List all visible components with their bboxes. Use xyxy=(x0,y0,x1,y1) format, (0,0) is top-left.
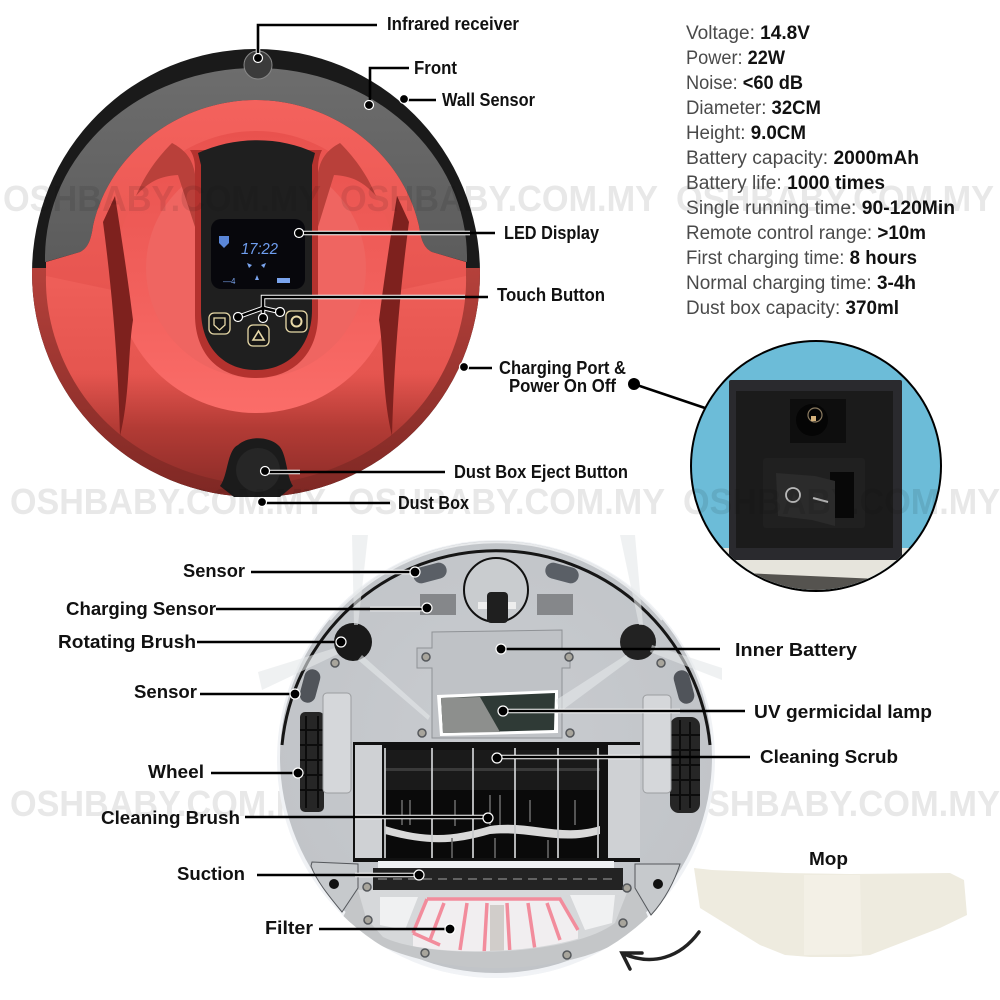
red lower body xyxy=(30,268,482,503)
callout: side sensor: Sensor xyxy=(134,682,197,702)
right corner plate xyxy=(635,864,680,915)
callout: cleaning brush: Cleaning Brush xyxy=(101,808,240,828)
right wheel xyxy=(670,717,700,813)
left wheel housing xyxy=(323,693,351,793)
watermark: row three: OSHBABY.COM.MY xyxy=(10,783,327,824)
callout: touch button xyxy=(234,285,605,322)
callout: wheel: Wheel xyxy=(148,762,204,782)
UV shield indicator xyxy=(219,236,229,248)
schedule icon: —4 xyxy=(223,277,236,286)
callout: UV germicidal lamp: UV germicidal lamp xyxy=(754,702,932,722)
brush guard bars xyxy=(385,748,598,858)
callout: cleaning scrub: Cleaning Scrub xyxy=(760,747,898,767)
right side brush bristles xyxy=(556,535,722,712)
callout: inner battery xyxy=(496,640,857,660)
rocker xyxy=(776,473,835,526)
left side sensor xyxy=(298,668,322,704)
callout: filter xyxy=(265,918,455,938)
callout: infrared receiver: Infrared receiver xyxy=(387,14,519,34)
silver plate xyxy=(280,541,712,973)
watermark: row two xyxy=(10,481,1000,522)
specifications list: Battery capacity: 2000mAh xyxy=(686,148,919,169)
specifications list: Remote control range: >10m xyxy=(686,223,926,244)
switch cavity xyxy=(830,472,854,518)
bin rim xyxy=(344,912,648,960)
left brush bearing xyxy=(355,745,382,858)
screws xyxy=(331,653,665,959)
specifications list: Normal charging time: 3-4h xyxy=(686,273,916,294)
watermark: row two: OSHBABY.COM.MY xyxy=(348,481,665,522)
specifications list: Battery life: 1000 times xyxy=(686,173,885,194)
specifications list: First charging time: 8 hours xyxy=(686,248,917,269)
callout: charging port xyxy=(460,358,626,396)
robot underside xyxy=(258,535,722,990)
callout: touch button: Touch Button xyxy=(497,285,605,305)
red body panel xyxy=(46,262,466,486)
callout: charging sensor xyxy=(66,599,432,619)
mop label: Mop xyxy=(809,849,848,869)
left dark stripe xyxy=(103,196,133,436)
suction slot xyxy=(373,868,623,890)
left dark wedge xyxy=(136,143,196,230)
left wheel xyxy=(300,712,324,812)
callout: port photo pointer xyxy=(628,378,705,408)
battery door xyxy=(417,630,570,738)
touch button: start xyxy=(248,325,269,346)
right front sensor xyxy=(544,561,580,585)
bristle brush xyxy=(385,790,600,858)
UV lamp window xyxy=(437,690,558,736)
touch button: UV xyxy=(209,313,230,334)
callout: UV germicidal lamp xyxy=(498,702,932,722)
left charging sensor xyxy=(420,594,456,615)
callout: LED display: LED Display xyxy=(504,223,599,243)
watermark: row one xyxy=(3,178,994,219)
callout: front xyxy=(364,58,457,110)
switch frame xyxy=(763,458,865,528)
DC jack xyxy=(796,404,828,436)
dust box latch xyxy=(220,438,293,497)
callout: wall sensor xyxy=(400,90,535,110)
right dark wedge xyxy=(317,143,376,230)
blue background xyxy=(690,340,942,592)
callout: front sensor xyxy=(183,561,420,581)
corner plate holes xyxy=(329,879,663,889)
callout: dust box xyxy=(258,493,469,513)
callout: filter: Filter xyxy=(265,918,313,938)
callout: wall sensor: Wall Sensor xyxy=(442,90,535,110)
specifications list xyxy=(686,23,955,319)
battery icon xyxy=(277,278,290,283)
pale top rim xyxy=(330,542,662,620)
specifications list: Single running time: 90-120Min xyxy=(686,198,955,219)
lower grey base xyxy=(754,574,868,590)
specifications list: Power: 22W xyxy=(686,48,785,69)
callout: cleaning brush xyxy=(101,808,493,828)
white base xyxy=(277,540,715,978)
control panel border xyxy=(190,150,322,378)
upper scrub roller xyxy=(385,750,600,790)
callout: dust box: Dust Box xyxy=(398,493,469,513)
watermark: row one: OSHBABY.COM.MY xyxy=(340,178,658,219)
right side sensor xyxy=(672,669,696,705)
specifications list: Dust box capacity: 370ml xyxy=(686,298,899,319)
callout: LED display xyxy=(294,223,599,243)
bin white panels xyxy=(380,895,615,930)
callout: wheel xyxy=(148,762,303,782)
callout: front sensor: Sensor xyxy=(183,561,245,581)
callout: dust box eject button: Dust Box Eject Button xyxy=(454,462,628,482)
callout: front: Front xyxy=(414,58,457,78)
touch button: power xyxy=(286,311,307,332)
callout: charging port: Charging Port & xyxy=(499,358,626,378)
on symbol xyxy=(813,498,828,502)
robot top view xyxy=(30,49,482,503)
LED screen xyxy=(211,219,305,289)
mop pad xyxy=(694,868,967,957)
callout: inner battery: Inner Battery xyxy=(735,640,857,660)
lower beige strip xyxy=(723,548,909,590)
off symbol xyxy=(786,488,800,502)
white strip xyxy=(378,861,614,868)
watermark: row three xyxy=(10,783,1000,824)
brush chamber xyxy=(353,742,640,862)
callout: infrared receiver xyxy=(254,14,519,62)
left brush hub xyxy=(334,623,372,661)
callout: side sensor xyxy=(134,682,300,702)
left front sensor xyxy=(412,561,448,585)
callout: rotating brush xyxy=(58,632,346,652)
callout: rotating brush: Rotating Brush xyxy=(58,632,196,652)
watermark: row two: OSHBABY.COM.MY xyxy=(10,481,326,522)
watermark: row one: OSHBABY.COM.MY xyxy=(3,178,321,219)
inner disc xyxy=(146,158,366,378)
bin interior xyxy=(358,890,628,952)
black top arc xyxy=(282,551,710,745)
right brush hub xyxy=(620,624,656,660)
robot outer shell xyxy=(32,49,480,497)
control panel xyxy=(198,140,315,370)
infrared receiver dome xyxy=(244,51,272,79)
callout: cleaning scrub xyxy=(492,747,898,767)
grey bumper xyxy=(45,68,467,262)
mode icons xyxy=(247,263,266,280)
callout: suction xyxy=(177,864,424,884)
right brush bearing xyxy=(608,745,640,858)
red upper cover xyxy=(46,100,466,290)
right charging sensor xyxy=(537,594,573,615)
left corner plate xyxy=(311,862,358,912)
specifications list: Height: 9.0CM xyxy=(686,123,806,144)
filter xyxy=(412,897,580,952)
specifications list: Noise: <60 dB xyxy=(686,73,803,94)
specifications list: Diameter: 32CM xyxy=(686,98,821,119)
port housing xyxy=(729,380,902,560)
left side brush bristles xyxy=(258,535,430,720)
recessed ring xyxy=(115,131,397,413)
right dark stripe xyxy=(379,196,409,436)
housing interior xyxy=(736,391,893,548)
callout: suction: Suction xyxy=(177,864,245,884)
jack plate xyxy=(790,399,846,443)
bottom white rim xyxy=(280,913,720,990)
callout: dust box eject button xyxy=(260,462,628,482)
right wheel housing xyxy=(643,695,671,793)
specifications list: Voltage: 14.8V xyxy=(686,23,810,44)
eject button xyxy=(236,448,280,492)
caster wheel housing xyxy=(464,558,528,623)
photo: charging port and power switch xyxy=(690,340,942,592)
callout: charging sensor: Charging Sensor xyxy=(66,599,216,619)
callout: charging port: Power On Off xyxy=(509,376,617,396)
clock digits: 17:22 xyxy=(241,241,278,258)
curved arrow to mop xyxy=(622,932,699,969)
